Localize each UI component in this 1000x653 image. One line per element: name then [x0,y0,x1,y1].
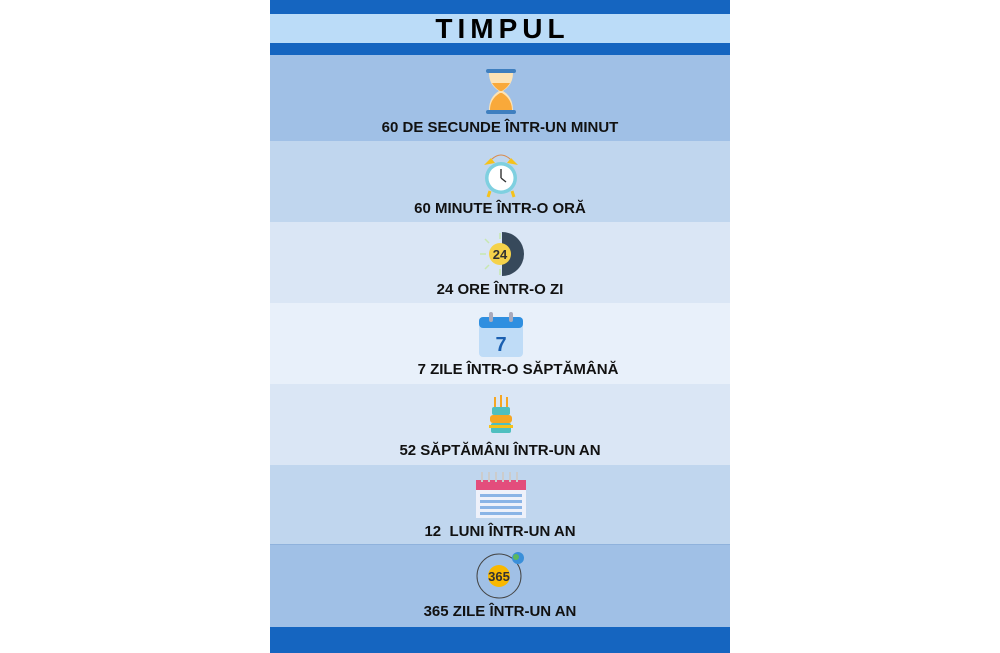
row 5: weeks [270,384,730,465]
icon: cake [489,395,513,433]
row 6: months [270,465,730,545]
label: 365 ZILE ÎNTR-UN AN [424,603,576,620]
row 4: days [270,303,730,384]
icon: calendar 7 [479,312,523,357]
icon: 365 orbit: 365 [488,569,510,584]
label: 7 ZILE ÎNTR-O SĂPTĂMÂNĂ [418,361,618,378]
icon: 24h: 24 [493,247,508,262]
label: 52 SĂPTĂMÂNI ÎNTR-UN AN [399,442,601,459]
label: 60 MINUTE ÎNTR-O ORĂ [414,200,586,217]
title: TIMPUL [435,13,570,44]
label: 60 DE SECUNDE ÎNTR-UN MINUT [382,119,618,136]
icon: calendar 7: 7 [495,334,507,356]
icon: 365 orbit [476,552,524,598]
icon: calendar grid [476,472,526,518]
row 1: seconds [270,55,730,141]
row 3: hours [270,222,730,303]
icon: alarm clock [484,154,518,198]
row 7: year [270,545,730,627]
title [270,14,730,43]
label: 24 ORE ÎNTR-O ZI [437,281,563,298]
row 2: minutes [270,141,730,222]
icon: 24h [480,232,524,276]
label: 12 LUNI ÎNTR-UN AN [424,523,576,540]
icon: hourglass [486,69,516,114]
